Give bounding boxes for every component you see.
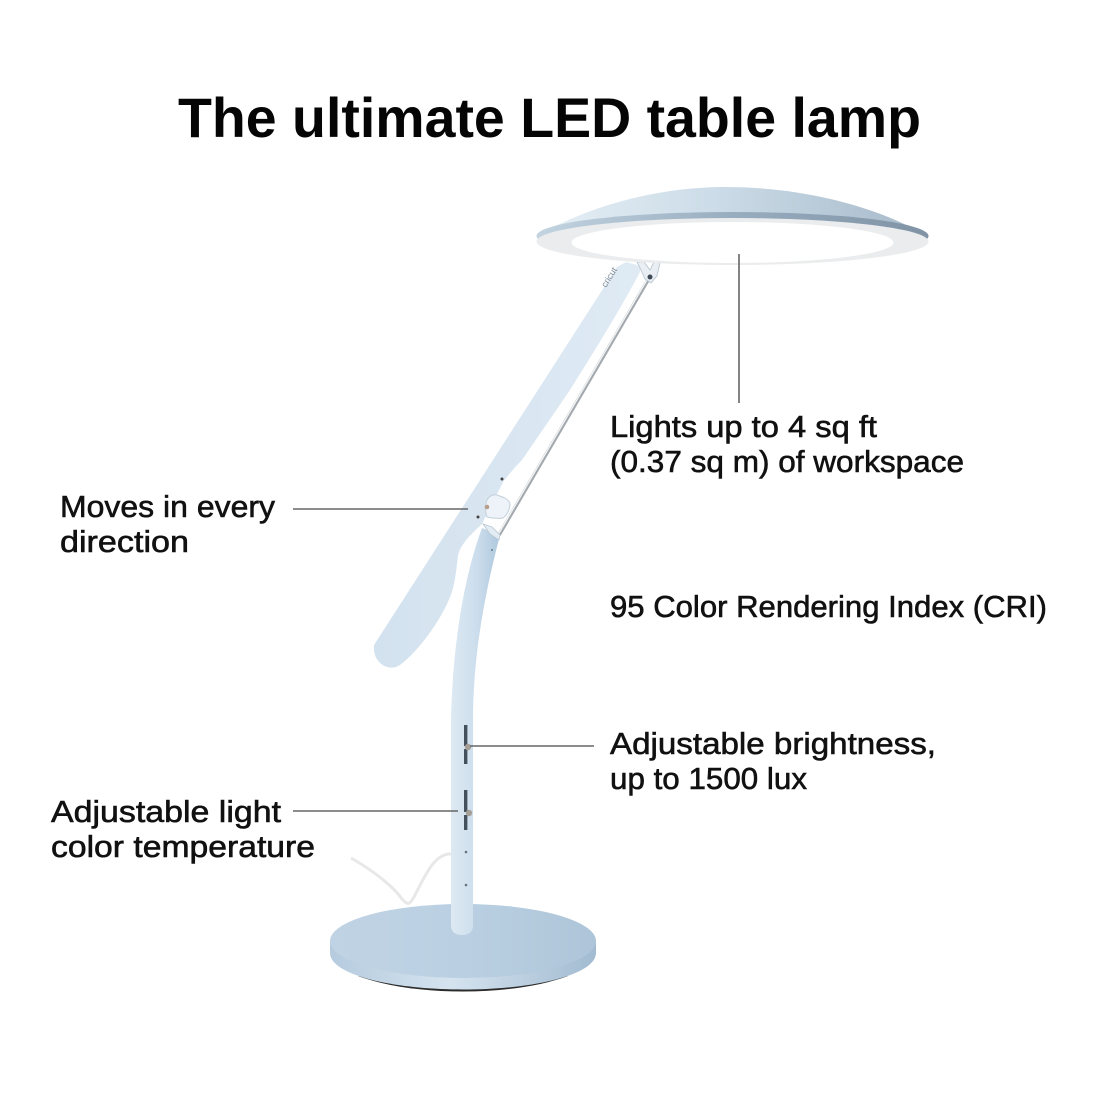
label: brightness: Adjustable brightness, — [610, 726, 936, 761]
power cord — [351, 854, 451, 903]
label: movement: direction — [60, 524, 189, 559]
label: workspace coverage: Lights up to 4 sq ft — [610, 409, 877, 444]
label: movement — [60, 489, 276, 559]
slider controls — [464, 725, 472, 886]
arm pivot joint — [476, 478, 510, 551]
label: color temperature — [51, 794, 315, 864]
lamp head bracket — [637, 262, 660, 283]
brand mark on arm: cricut — [599, 265, 619, 289]
label: brightness: up to 1500 lux — [610, 761, 808, 796]
label: workspace coverage: (0.37 sq m) of workspace — [610, 444, 964, 479]
callout line: color temperature — [293, 810, 458, 812]
curved stem — [451, 528, 500, 935]
support rod — [498, 279, 648, 535]
lamp base — [330, 904, 596, 992]
label: workspace coverage — [610, 409, 964, 479]
lamp head — [536, 187, 929, 265]
counterweight arm — [374, 262, 640, 668]
label: movement: Moves in every — [60, 489, 276, 524]
callout line: brightness — [470, 745, 594, 747]
title: The ultimate LED table lamp — [178, 86, 921, 149]
label: color temperature: color temperature — [51, 829, 315, 864]
label: brightness — [610, 726, 936, 796]
lamp illustration — [330, 187, 929, 992]
callout line: lit area — [738, 254, 740, 403]
callout line: movement — [293, 508, 468, 510]
label: color temperature: Adjustable light — [51, 794, 281, 829]
label: CRI: 95 Color Rendering Index (CRI) — [610, 589, 1047, 624]
